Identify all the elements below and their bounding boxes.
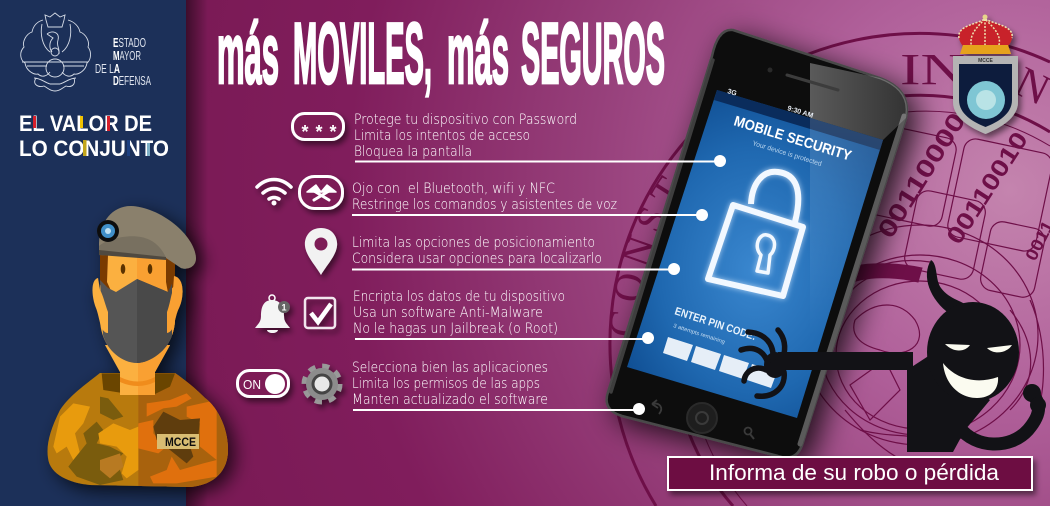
EMAD wordmark: MAYOR <box>113 48 141 63</box>
text: apps tips: Manten actualizado el software <box>352 392 548 408</box>
soldier <box>48 206 238 490</box>
icon: checkbox <box>305 298 335 328</box>
title: más <box>217 6 279 102</box>
beret <box>99 206 196 269</box>
text: location tips <box>352 235 602 267</box>
crest: MCCE: MCCE <box>978 58 994 64</box>
text: data protection tips: No le hagas un Jailbreak (o Root) <box>353 321 558 337</box>
seal watermark <box>610 33 1050 506</box>
text: wireless tips: Ojo con el Bluetooth, wifi y NFC <box>352 181 555 197</box>
icon: settings gear <box>304 366 340 402</box>
slogan: el valor de lo conjunto: LO CONJUNTO <box>19 136 169 161</box>
pin entry <box>663 305 777 388</box>
icon: wifi <box>257 180 291 204</box>
beret badge <box>97 220 119 242</box>
pin entry: ENTER PIN CODE: <box>673 305 758 343</box>
EMAD wordmark: ESTADO <box>113 35 146 50</box>
thief <box>741 260 1046 452</box>
crest: MCCE <box>953 14 1018 134</box>
status bar: 3G <box>726 88 738 98</box>
phone buttons <box>652 400 754 439</box>
report banner: Informa de su robo o pérdida <box>709 460 1000 485</box>
device protected note: Your device is protected <box>751 140 822 168</box>
phone <box>607 30 907 458</box>
phone body <box>607 30 907 458</box>
text: wireless tips <box>352 181 617 213</box>
thief grin <box>943 363 998 398</box>
seal lettering: CONST <box>612 175 669 336</box>
thief head <box>927 302 1019 402</box>
tip group 5: apps and software <box>238 360 645 415</box>
shield <box>953 56 1018 134</box>
pointer line 3 <box>352 263 680 275</box>
icon: password field <box>292 114 344 142</box>
title: MOVILES, <box>293 6 432 102</box>
slogan: el valor de lo conjunto <box>19 111 169 161</box>
name tag <box>157 434 199 449</box>
text: apps tips: Selecciona bien las aplicaciones <box>352 360 548 376</box>
torso camouflage <box>48 370 238 490</box>
title: más <box>447 6 509 102</box>
EMAD emblem <box>21 13 91 91</box>
icon: bluetooth <box>300 176 342 208</box>
pointer line 2 <box>352 209 708 221</box>
ears <box>92 278 108 333</box>
phone side highlights <box>611 60 904 444</box>
text: wireless tips: Restringe los comandos y asistentes de voz <box>352 197 617 213</box>
text: password tips: Bloquea la pantalla <box>354 144 472 160</box>
pointer line 4 <box>355 332 654 344</box>
status bar <box>726 88 814 120</box>
text: location tips: Limita las opciones de posicionamiento <box>352 235 595 251</box>
thief arm <box>778 352 913 370</box>
EMAD wordmark: DE LA <box>95 61 120 76</box>
phone glare <box>810 63 907 140</box>
icon: notification bell <box>255 295 290 333</box>
face <box>100 255 175 363</box>
thief claw hand <box>741 330 786 396</box>
seal lettering: 00110000 <box>872 108 971 243</box>
EMAD wordmark: DEFENSA <box>113 73 151 88</box>
status bar: 9:30 AM <box>786 105 814 120</box>
text: data protection tips <box>353 289 565 337</box>
thief body <box>907 355 990 452</box>
icon: on toggle <box>238 370 288 396</box>
text: apps tips: Limita los permisos de las apps <box>352 376 540 392</box>
text: password tips: Limita los intentos de acceso <box>354 128 530 144</box>
screen <box>627 90 883 418</box>
name tag: MCCE <box>165 437 196 449</box>
tip group 1: password <box>292 112 726 167</box>
speaker and camera <box>768 68 838 90</box>
neck <box>105 345 170 395</box>
tip group 2: wireless <box>257 176 708 221</box>
pointer line 5 <box>353 403 645 415</box>
text: password tips <box>354 112 577 160</box>
seal lettering: 00110010 <box>941 127 1034 249</box>
crown <box>959 14 1012 54</box>
icon: map pin <box>305 228 337 275</box>
tip group 4: data protection <box>255 289 654 344</box>
slogan: el valor de lo conjunto: EL VALOR DE <box>19 111 152 136</box>
seal lettering <box>612 45 1050 336</box>
icon: password field: *** <box>302 122 344 142</box>
pin entry: 3 attempts remaining <box>672 323 726 346</box>
mask <box>100 279 172 363</box>
thief tail <box>960 395 1039 444</box>
text: apps tips <box>352 360 548 408</box>
left panel <box>0 0 208 506</box>
padlock <box>708 172 803 296</box>
text: location tips: Considera usar opciones para localizarlo <box>352 251 602 267</box>
tip group 3: location <box>305 228 680 275</box>
thief eyes <box>945 344 1012 352</box>
text: data protection tips: Encripta los datos de tu dispositivo <box>353 289 565 305</box>
infographic canvas: SEGUROS <box>521 6 665 102</box>
seal lettering: IN <box>900 45 965 94</box>
icon: notification bell: 1 <box>281 302 287 312</box>
icon: on toggle: ON <box>243 377 261 392</box>
mobile security heading: MOBILE SECURITY <box>732 114 853 165</box>
text: data protection tips: Usa un software Anti-Malware <box>353 305 543 321</box>
EMAD wordmark <box>95 35 151 88</box>
thief horn <box>927 260 974 314</box>
pointer line 1 <box>355 155 726 167</box>
text: password tips: Protege tu dispositivo con Password <box>354 112 577 128</box>
report banner <box>668 457 1032 490</box>
